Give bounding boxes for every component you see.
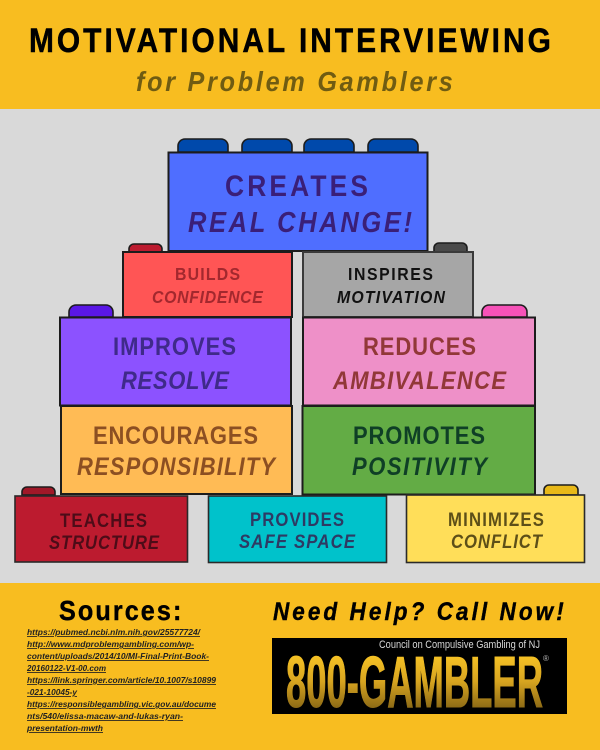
label: CREATES	[225, 168, 368, 202]
studs	[178, 139, 418, 152]
stud	[129, 244, 162, 252]
brick: creates real change	[168, 139, 428, 251]
brick: promotes positivity: POSITIVITY	[352, 453, 489, 480]
title: MOTIVATIONAL INTERVIEWING	[29, 21, 551, 59]
stud	[482, 305, 527, 317]
brick: reduces ambivalence: AMBIVALENCE	[332, 367, 507, 394]
brick: teaches structure	[15, 487, 188, 562]
label: MINIMIZES	[448, 509, 544, 530]
brick: inspires motivation	[303, 243, 473, 317]
sources list: content/uploads/2014/10/MI-Final-Print-Book-	[27, 651, 209, 661]
brick: builds confidence: CONFIDENCE	[152, 287, 264, 307]
brick: teaches structure: STRUCTURE	[49, 532, 160, 553]
brick: provides safe space: SAFE SPACE	[239, 531, 356, 552]
brick: builds confidence	[123, 244, 292, 317]
label: PROVIDES	[250, 509, 344, 530]
stud	[434, 243, 467, 252]
label: INSPIRES	[348, 264, 433, 284]
footer band	[0, 583, 600, 750]
stud	[69, 305, 113, 317]
brick: encourages responsibility	[61, 406, 292, 494]
brick: reduces ambivalence	[303, 305, 535, 406]
stud	[544, 485, 578, 495]
brick: promotes positivity	[302, 406, 535, 494]
brick: minimizes conflict	[406, 485, 584, 562]
brick: improves resolve	[60, 305, 291, 406]
label: PROMOTES	[353, 422, 485, 449]
sources list: https://responsiblegambling.vic.gov.au/docume	[27, 699, 216, 709]
sources list: https://pubmed.ncbi.nlm.nih.gov/25577724/	[27, 627, 202, 637]
sources list: https://link.springer.com/article/10.1007/s10899	[27, 675, 216, 685]
sources list: nts/540/elissa-macaw-and-lukas-ryan-	[27, 711, 183, 721]
label: TEACHES	[60, 510, 147, 531]
label: ENCOURAGES	[93, 422, 258, 449]
sources list: presentation-mwth	[26, 723, 103, 733]
brick: minimizes conflict: CONFLICT	[451, 531, 544, 552]
sources list: -021-10045-y	[27, 687, 78, 697]
label: REDUCES	[363, 333, 476, 360]
registered mark: ®	[543, 654, 549, 663]
label: IMPROVES	[113, 333, 236, 360]
logo tagline: Council on Compulsive Gambling of NJ	[379, 639, 540, 651]
stud	[22, 487, 55, 495]
sources heading: Sources:	[59, 595, 181, 626]
brick: improves resolve: RESOLVE	[121, 367, 230, 394]
brick: inspires motivation: MOTIVATION	[337, 287, 446, 307]
brick: encourages responsibility: RESPONSIBILITY	[77, 453, 277, 480]
logo: 800-GAMBLER	[272, 638, 567, 723]
label: BUILDS	[175, 264, 240, 284]
sources list: 20160122-V1-00.com	[26, 663, 106, 673]
header band	[0, 0, 600, 109]
brick: provides safe space	[208, 496, 386, 562]
sources list: http://www.mdproblemgambling.com/wp-	[27, 639, 194, 649]
sources list	[26, 627, 216, 733]
call to action: Need Help? Call Now!	[273, 598, 564, 626]
subtitle: for Problem Gamblers	[136, 66, 453, 97]
brick: creates real change: REAL CHANGE!	[188, 205, 412, 238]
